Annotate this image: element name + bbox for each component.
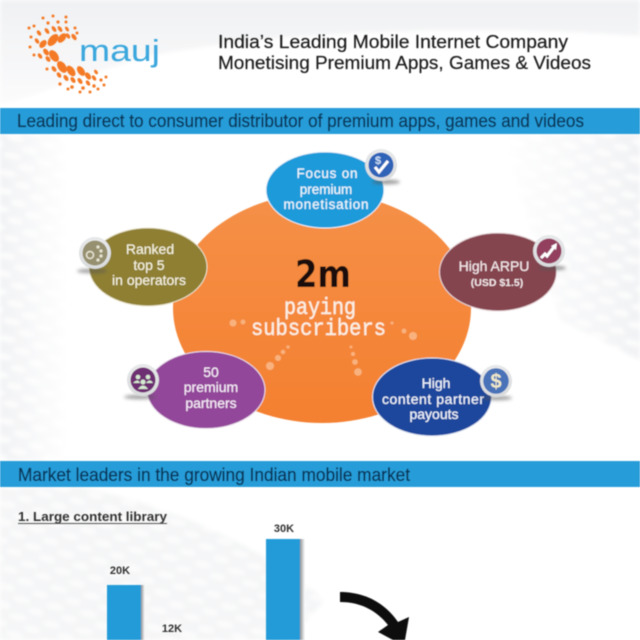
icon: rising arrow badge: [533, 235, 566, 270]
bubble: ranked top 5 in operators: in operators: [112, 272, 186, 288]
logo: mauj: [28, 14, 160, 94]
bubble: high content partner payouts: [372, 358, 512, 436]
central label: paying: [284, 295, 356, 321]
section banner: distributor: Leading direct to consumer distributor of premium apps, games and videos: [17, 111, 584, 131]
bubble: ranked top 5 in operators: [77, 228, 207, 306]
section banner: market leaders: Market leaders in the growing Indian mobile market: [18, 465, 410, 485]
bubble: focus on premium monetisation: monetisation: [284, 197, 368, 212]
bubble: focus on premium monetisation: Focus on: [296, 166, 358, 181]
icon: dollar badge: $: [490, 371, 502, 393]
bubble: ranked top 5 in operators: top 5: [133, 257, 165, 273]
logo wordmark: mauj: [79, 33, 160, 68]
bubble: 50 premium partners: premium: [184, 379, 238, 395]
bubble text: high ARPU: High ARPU: [459, 258, 529, 274]
icon: operators badge: [77, 237, 111, 274]
central figure: 2m: [295, 253, 351, 296]
bar: 12K label: 12K: [162, 623, 182, 635]
central label: subscribers: [251, 316, 386, 342]
central decorative dots: [230, 320, 417, 376]
section banner: market leaders: [0, 461, 640, 487]
bubble: 50 premium partners: 50: [203, 364, 219, 380]
bar: 20K: [107, 565, 145, 640]
bar: 20K: 20K: [110, 565, 130, 577]
central label: [251, 295, 386, 342]
icon: dollar check badge: $: [375, 155, 381, 167]
central circle: 2m paying subscribers: [173, 193, 471, 423]
bar: 30K: [266, 523, 305, 640]
title: [218, 32, 591, 73]
bar chart: content library: [107, 523, 305, 640]
bubble: focus on premium monetisation: [266, 149, 400, 228]
arrow: curved black: [340, 592, 409, 640]
bubble: focus on premium monetisation: premium: [300, 182, 352, 197]
icon: partners badge: [124, 364, 159, 400]
logo dots: [28, 14, 108, 94]
subheading: large content library: 1. Large content library: [18, 509, 168, 524]
bubble: high content partner payouts: content partner: [382, 391, 484, 407]
bubble text: high ARPU: [459, 258, 529, 289]
bubble text: high ARPU: (USD $1.5): [471, 277, 523, 289]
bubble: ranked top 5 in operators: Ranked: [126, 241, 174, 257]
bubble: 50 premium partners: [124, 352, 265, 428]
bubble: high content partner payouts: High: [422, 375, 450, 391]
bubble: high content partner payouts: payouts: [409, 406, 459, 422]
title: India’s Leading Mobile Internet Company: [218, 32, 568, 52]
bubble: 50 premium partners: partners: [185, 395, 237, 411]
bubble: high ARPU: [440, 233, 566, 311]
title: Monetising Premium Apps, Games & Videos: [218, 53, 591, 73]
bar: 30K: 30K: [274, 523, 294, 535]
